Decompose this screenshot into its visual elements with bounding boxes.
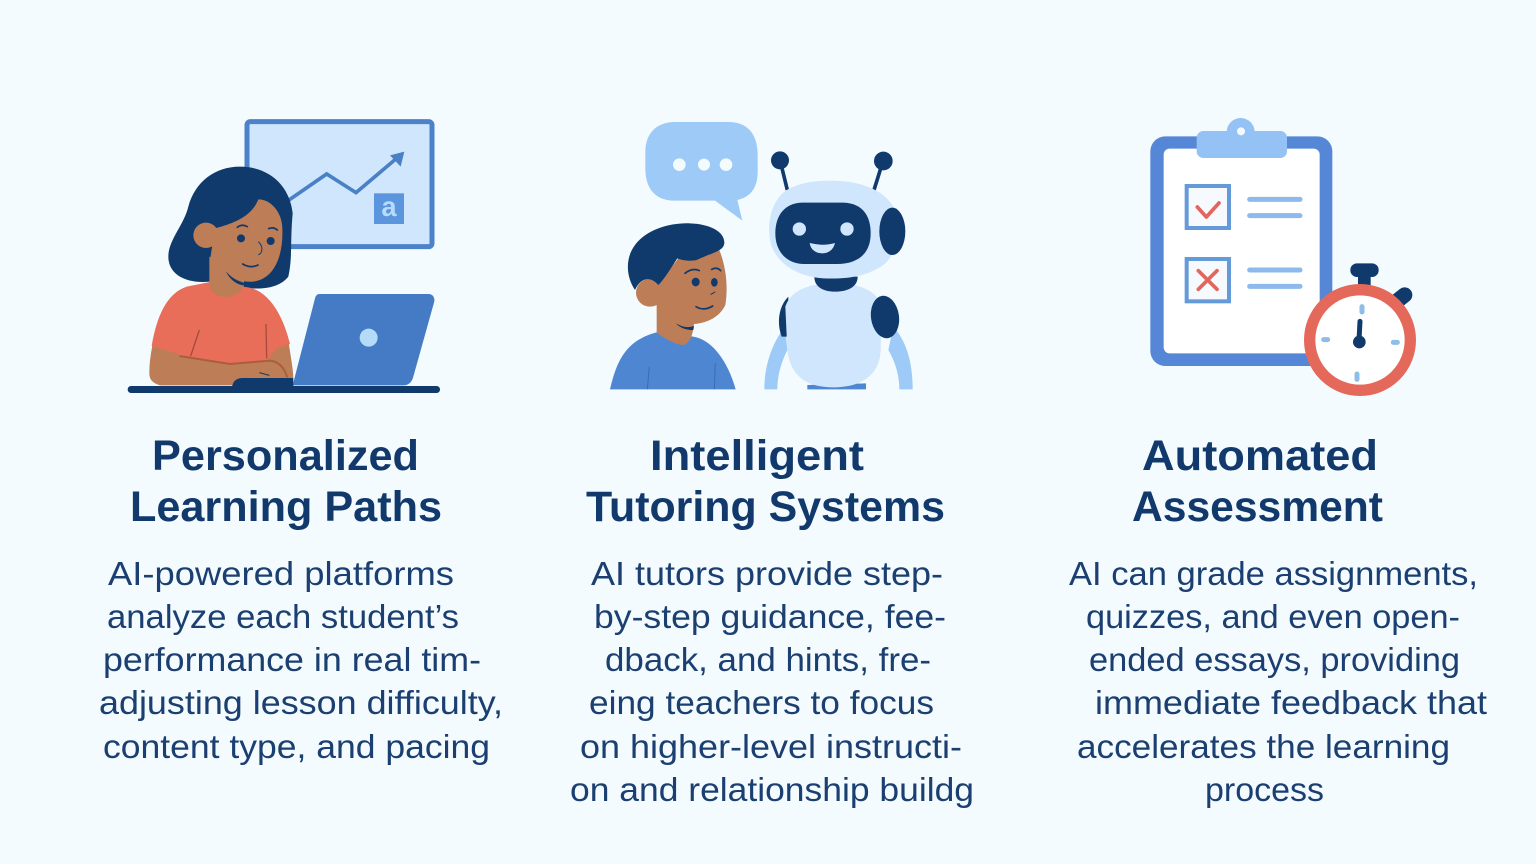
- body text: intelligent tutoring systems: AI tutors provide step-: [591, 555, 943, 592]
- text lines: second item: [1250, 270, 1300, 286]
- body text: automated assessment: ended essays, providing: [1089, 641, 1460, 678]
- body text: intelligent tutoring systems: [570, 555, 974, 808]
- body text: automated assessment: AI can grade assignments,: [1069, 555, 1478, 592]
- body text: personalized learning paths: content type, and pacing: [103, 728, 490, 765]
- woman: [149, 167, 293, 385]
- heading: automated assessment: Automated: [1142, 432, 1378, 480]
- heading: automated assessment: Assessment: [1132, 483, 1383, 531]
- heading: intelligent tutoring systems: [586, 432, 945, 531]
- heading: intelligent tutoring systems: Tutoring Systems: [586, 483, 945, 531]
- body text: personalized learning paths: [99, 555, 503, 765]
- body text: personalized learning paths: adjusting lesson difficulty,: [99, 684, 503, 721]
- panel: automated assessment: [1069, 118, 1487, 808]
- body text: intelligent tutoring systems: on higher-level instructi-: [580, 728, 962, 765]
- body text: automated assessment: accelerates the learning: [1077, 728, 1450, 765]
- checkbox: check: [1187, 186, 1229, 228]
- heading: personalized learning paths: [130, 432, 442, 531]
- body text: automated assessment: [1069, 555, 1487, 808]
- body text: automated assessment: immediate feedback that: [1095, 684, 1487, 721]
- clipboard: [1150, 118, 1332, 366]
- panel: personalized learning paths: [99, 122, 503, 765]
- stopwatch: [1310, 263, 1410, 390]
- body text: intelligent tutoring systems: by-step guidance, fee-: [594, 598, 946, 635]
- panel: intelligent tutoring systems: [570, 122, 974, 808]
- text lines: first item: [1250, 199, 1300, 216]
- chart board: a: [381, 191, 397, 222]
- body text: intelligent tutoring systems: on and relationship buildg: [570, 771, 974, 808]
- illustration: boy talking with robot: [610, 122, 913, 389]
- body text: personalized learning paths: analyze each student’s: [107, 598, 459, 635]
- body text: personalized learning paths: performance in real tim-: [103, 641, 481, 678]
- desk: [128, 378, 440, 393]
- speech bubble: [645, 122, 758, 221]
- illustration: student at laptop with progress chart: [128, 122, 440, 393]
- heading: personalized learning paths: Personalized: [152, 432, 419, 480]
- body text: intelligent tutoring systems: dback, and hints, fre-: [605, 641, 931, 678]
- robot: [764, 151, 913, 389]
- illustration: clipboard with stopwatch: [1150, 118, 1410, 390]
- checkbox: cross: [1187, 259, 1229, 301]
- body text: intelligent tutoring systems: eing teachers to focus: [589, 684, 934, 721]
- body text: automated assessment: process: [1205, 771, 1324, 808]
- body text: personalized learning paths: AI-powered platforms: [108, 555, 454, 592]
- heading: automated assessment: [1132, 432, 1383, 531]
- boy: [610, 223, 736, 389]
- heading: intelligent tutoring systems: Intelligent: [650, 432, 864, 480]
- laptop: [293, 294, 434, 385]
- body text: automated assessment: quizzes, and even open-: [1086, 598, 1460, 635]
- heading: personalized learning paths: Learning Paths: [130, 483, 442, 531]
- chart board: [247, 122, 432, 247]
